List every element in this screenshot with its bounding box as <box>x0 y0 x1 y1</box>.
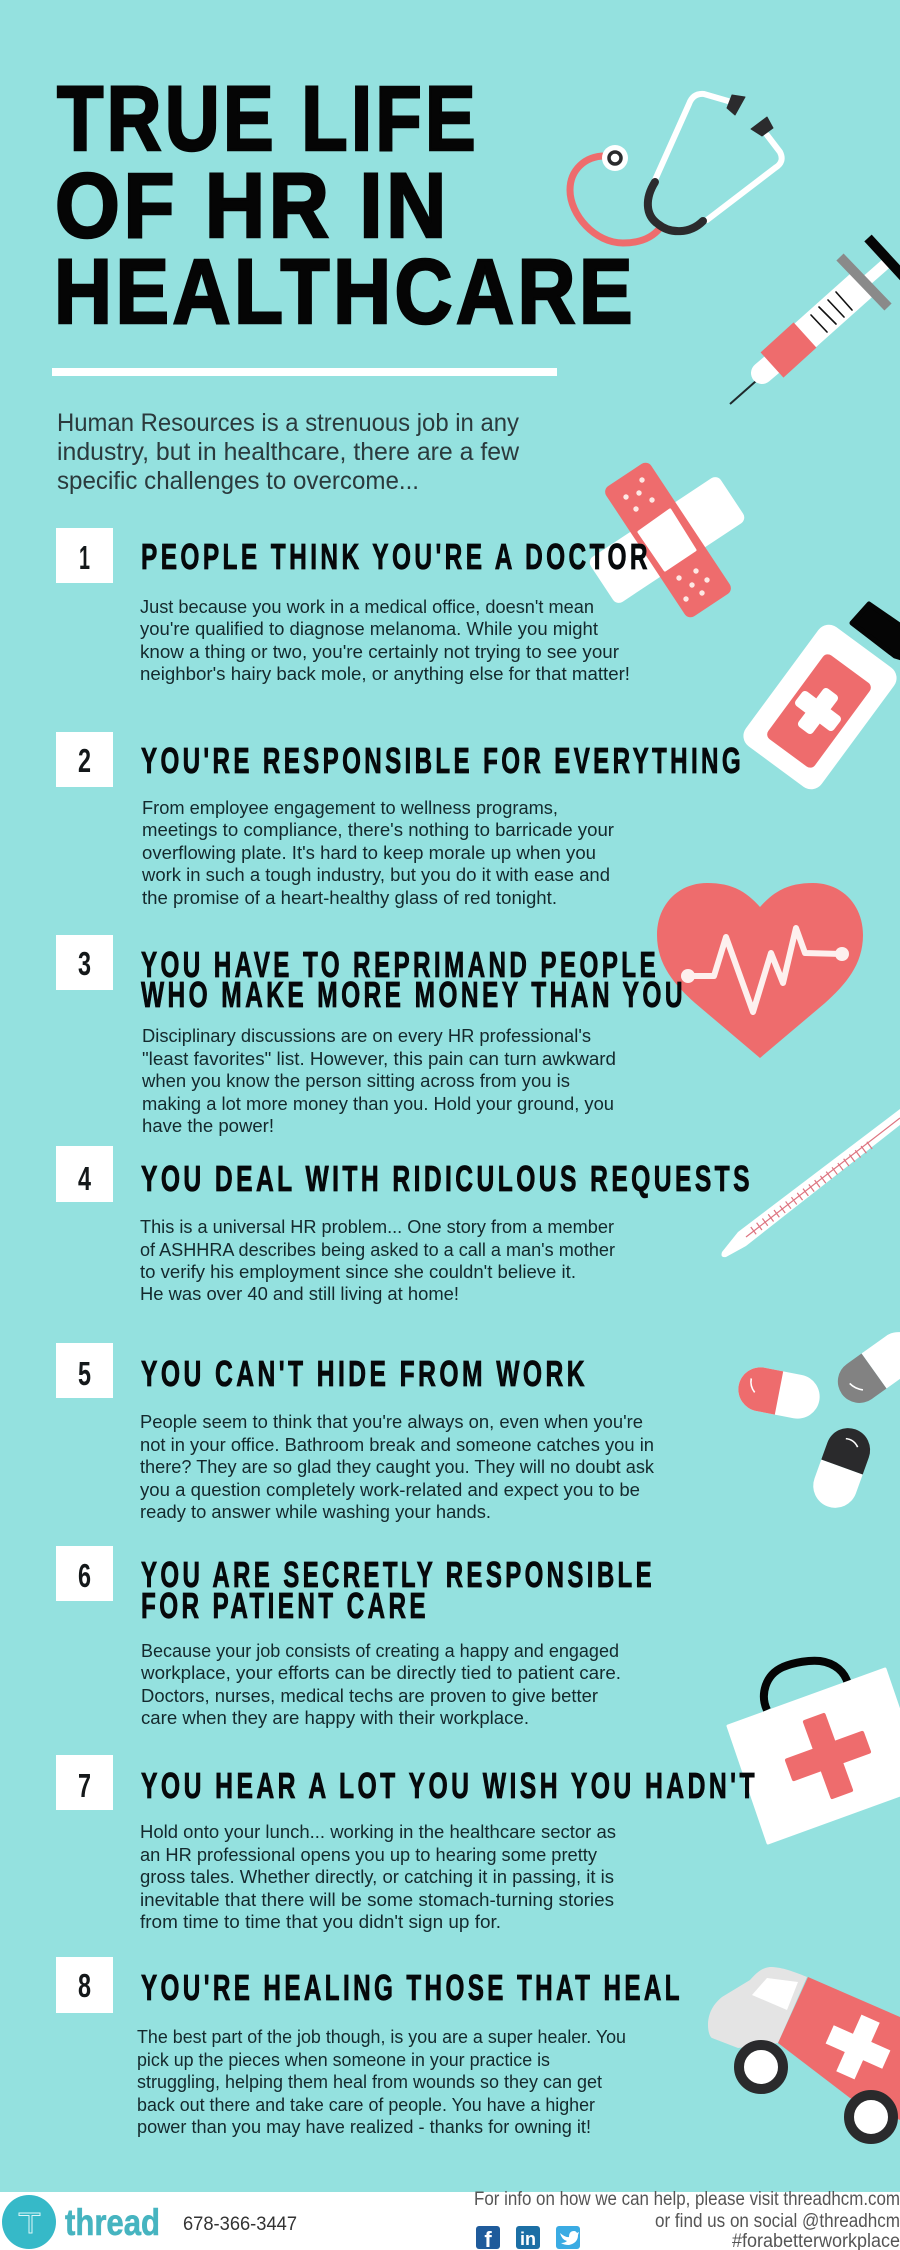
body 2: meetings to compliance, there's nothing to barricade your <box>142 819 614 840</box>
number box 4: 4 <box>78 1160 91 1197</box>
body 4: of ASHHRA describes being asked to a call a man's mother <box>140 1239 615 1260</box>
icon: linkedin <box>516 2226 540 2249</box>
body 8: pick up the pieces when someone in your practice is <box>137 2049 550 2070</box>
number box 6: 6 <box>78 1557 91 1594</box>
number box 8 <box>56 1957 113 2013</box>
body 5: not in your office. Bathroom break and someone catches you in <box>140 1434 654 1455</box>
body 7: from time to time that you didn't sign up for. <box>140 1911 501 1932</box>
number box 7 <box>56 1755 113 1810</box>
body 1 <box>140 596 630 684</box>
body 5: ready to answer while washing your hands. <box>140 1501 491 1522</box>
icon: heart with pulse <box>657 883 863 1058</box>
icon: ambulance <box>708 1967 900 2139</box>
body 5: People seem to think that you're always on, even when you're <box>140 1411 643 1432</box>
heading 5: YOU CAN'T HIDE FROM WORK <box>141 1353 588 1394</box>
intro text <box>57 409 520 495</box>
body 6: care when they are happy with their workplace. <box>141 1707 529 1728</box>
body 5 <box>140 1411 655 1522</box>
body 5: you a question completely work-related and expect you to be <box>140 1479 640 1500</box>
body 3: when you know the person sitting across from you is <box>141 1070 570 1091</box>
icon: coral and white pill <box>735 1364 823 1422</box>
icon: syringe <box>730 238 900 404</box>
body 8: struggling, helping them heal from wounds so they can get <box>137 2071 602 2092</box>
title: HEALTHCARE <box>54 241 636 343</box>
intro text: industry, but in healthcare, there are a few <box>57 438 520 466</box>
body 1: Just because you work in a medical office, doesn't mean <box>140 596 594 617</box>
body 1: neighbor's hairy back mole, or anything else for that matter! <box>140 663 630 684</box>
body 7: Hold onto your lunch... working in the healthcare sector as <box>140 1821 616 1842</box>
panel: item 6 <box>56 1546 655 1728</box>
body 6: Because your job consists of creating a happy and engaged <box>141 1640 619 1661</box>
number box 6 <box>56 1546 113 1601</box>
body 6 <box>140 1640 621 1728</box>
number box 5: 5 <box>78 1355 91 1392</box>
body 4: This is a universal HR problem... One story from a member <box>140 1216 614 1237</box>
body 8: The best part of the job though, is you are a super healer. You <box>137 2026 626 2047</box>
number box 3 <box>56 935 113 990</box>
number box 2 <box>56 732 113 787</box>
body 2: overflowing plate. It's hard to keep morale up when you <box>142 842 596 863</box>
icon: bandage <box>587 460 747 620</box>
contact text <box>474 2189 900 2250</box>
icon: facebook <box>476 2226 500 2250</box>
panel: item 5 <box>56 1343 655 1522</box>
body 7 <box>140 1821 616 1932</box>
panel: item 2 <box>56 732 744 908</box>
title: TRUE LIFE <box>57 68 479 170</box>
number box 7: 7 <box>78 1767 91 1804</box>
heading 3: YOU HAVE TO REPRIMAND PEOPLE <box>141 944 659 985</box>
body 3: Disciplinary discussions are on every HR professional's <box>142 1025 591 1046</box>
intro text: specific challenges to overcome... <box>57 467 419 495</box>
body 8: power than you may have realized - thanks for owning it! <box>137 2116 591 2137</box>
body 8 <box>137 2026 626 2137</box>
body 6: workplace, your efforts can be directly tied to patient care. <box>140 1662 621 1683</box>
body 2: work in such a tough industry, but you do it with ease and <box>141 864 610 885</box>
icon: grey and white pill <box>829 1324 900 1411</box>
body 3 <box>141 1025 616 1136</box>
icon: stethoscope <box>570 94 782 243</box>
number box 2: 2 <box>78 742 91 779</box>
body 5: there? They are so glad they caught you. They will no doubt ask <box>140 1456 655 1477</box>
number box 4 <box>56 1146 113 1202</box>
body 4: to verify his employment since she couldn't believe it. <box>140 1261 576 1282</box>
icon: twitter <box>556 2226 580 2249</box>
footer <box>0 2189 900 2250</box>
icon: medicine bottle <box>738 604 900 794</box>
body 1: you're qualified to diagnose melanoma. While you might <box>140 618 598 639</box>
phone number: 678-366-3447 <box>183 2214 297 2235</box>
title: OF HR IN <box>55 155 450 257</box>
panel: item 4 <box>56 1146 753 1304</box>
body 7: inevitable that there will be some stomach-turning stories <box>140 1889 614 1910</box>
number box 8: 8 <box>78 1967 91 2004</box>
panel: item 7 <box>56 1755 758 1932</box>
number box 1 <box>56 528 113 583</box>
heading 6 <box>141 1554 655 1626</box>
icon: first aid kit <box>728 1661 900 1843</box>
icon: linkedin: in <box>520 2229 536 2249</box>
heading 6: YOU ARE SECRETLY RESPONSIBLE <box>141 1554 655 1595</box>
body 2: From employee engagement to wellness programs, <box>142 797 558 818</box>
number box 3: 3 <box>78 945 91 982</box>
body 8: back out there and take care of people. You have a higher <box>137 2094 595 2115</box>
heading 6: FOR PATIENT CARE <box>141 1585 429 1626</box>
icon: thermometer <box>722 1109 900 1257</box>
body 7: an HR professional opens you up to hearing some pretty <box>140 1844 598 1865</box>
body 2 <box>141 797 614 908</box>
body 3: making a lot more money than you. Hold your ground, you <box>142 1093 614 1114</box>
icon: black and white pill <box>807 1422 876 1514</box>
logo: thread <box>2 2195 160 2249</box>
body 3: have the power! <box>142 1115 274 1136</box>
body 4 <box>140 1216 615 1304</box>
body 1: know a thing or two, you're certainly not trying to see your <box>140 641 619 662</box>
panel: item 3 <box>56 935 686 1136</box>
number box 1: 1 <box>79 539 90 576</box>
heading 3 <box>141 944 686 1015</box>
intro text: Human Resources is a strenuous job in any <box>57 409 519 437</box>
number box 5 <box>56 1343 113 1398</box>
panel: item 8 <box>56 1957 683 2137</box>
heading 1: PEOPLE THINK YOU'RE A DOCTOR <box>141 536 651 577</box>
body 6: Doctors, nurses, medical techs are proven to give better <box>141 1685 598 1706</box>
panel: item 1 <box>56 528 651 684</box>
logo: thread: thread <box>65 2202 160 2243</box>
body 2: the promise of a heart-healthy glass of red tonight. <box>142 887 557 908</box>
body 7: gross tales. Whether directly, or catching it in passing, it is <box>140 1866 614 1887</box>
body 3: "least favorites" list. However, this pain can turn awkward <box>142 1048 616 1069</box>
title <box>54 68 636 343</box>
body 4: He was over 40 and still living at home! <box>140 1283 459 1304</box>
